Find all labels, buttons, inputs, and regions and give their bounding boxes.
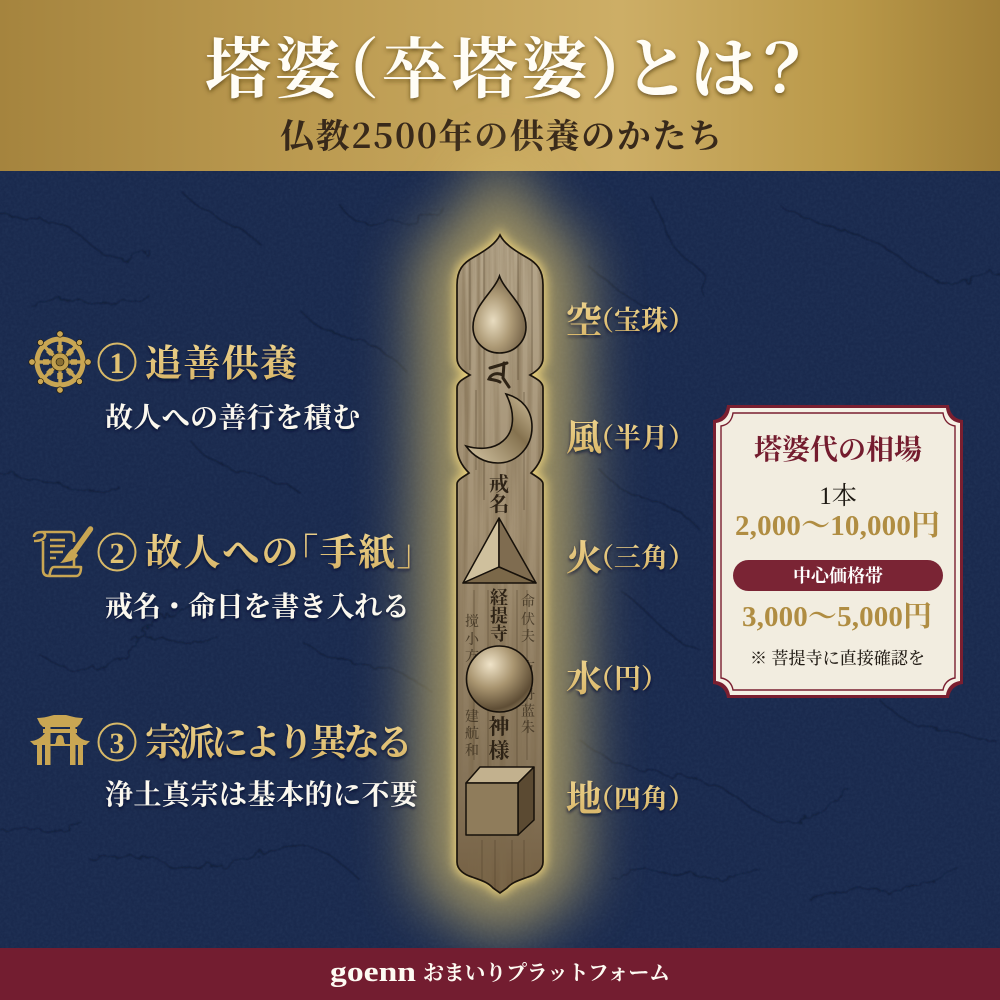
heading 2: 故人への「手紙」 [145, 522, 415, 576]
note: ※ 菩提寺に直接確認を [750, 644, 925, 669]
tablet inscriptions: 夫 [521, 626, 535, 646]
number badge 3 [98, 724, 136, 760]
central price pill [733, 560, 943, 591]
tablet inscriptions: 様 [488, 735, 510, 765]
card title: 塔婆代の相場 [754, 428, 922, 468]
description 2: 戒名・命日を書き入れる [105, 585, 410, 625]
label: earth: 地 [566, 771, 602, 822]
icon: sacred jewel drop (sky) [473, 276, 526, 353]
label: wind: （半月） [600, 416, 682, 455]
element labels column [566, 293, 682, 822]
icon: dharma wheel [29, 331, 91, 393]
tablet inscriptions: 建 [465, 706, 479, 726]
number badge 3: 3 [110, 727, 124, 760]
number badge 2: 2 [110, 537, 124, 570]
tablet inscriptions: 搅 [465, 611, 479, 631]
tablet inscriptions: 小 [465, 629, 480, 649]
icon: cube (earth) [466, 767, 534, 835]
label: sky: 空 [566, 293, 602, 344]
icon: sphere (water) [466, 646, 532, 712]
label: wind [566, 410, 682, 461]
tablet inscriptions: 寺 [490, 620, 508, 646]
navy paper background [0, 170, 1000, 950]
tablet inscriptions: 伏 [521, 609, 535, 629]
subtitle: 仏教2500年の供養のかたち [280, 109, 722, 158]
point 1: memorial merit [29, 331, 360, 436]
sanskrit seed mark [489, 363, 509, 387]
posthumous name text: 戒 [489, 468, 509, 497]
quantity: 1本 [819, 482, 857, 510]
tablet inscriptions: 和 [465, 740, 479, 760]
label: earth [566, 771, 682, 822]
glow behind stupa [457, 235, 543, 893]
icon: scroll and brush [34, 529, 90, 576]
central price pill: 中心価格帯 [793, 562, 883, 588]
heading 1: 追善供養 [145, 333, 297, 387]
number badge 2 [98, 534, 136, 570]
footer band [0, 948, 1000, 1000]
tablet inscriptions: 経 [490, 584, 508, 610]
label: water: 水 [566, 651, 602, 702]
label: water [566, 651, 655, 702]
platform tagline: おまいりプラットフォーム [423, 957, 670, 987]
icon: triangular pyramid (fire) [463, 518, 536, 583]
label: sky: （宝珠） [600, 299, 682, 338]
tablet inscriptions: 神 [488, 711, 510, 741]
heading 3: 宗派により異なる [145, 712, 413, 766]
tablet inscriptions: 丹 [521, 684, 535, 704]
tablet inscriptions: 朱 [521, 717, 535, 737]
panel: price card [713, 405, 963, 698]
tablet inscriptions: 命 [521, 591, 535, 611]
icon: temple gate [30, 715, 90, 765]
description 1: 故人への善行を積む [105, 396, 360, 436]
label: sky [566, 293, 682, 344]
posthumous name text: 名 [489, 488, 509, 517]
header band [0, 0, 1000, 171]
tablet inscriptions: 提 [490, 602, 508, 628]
label: wind: 風 [566, 410, 602, 461]
central price range: 3,000～5,000円 [742, 601, 932, 633]
icon: crescent moon (wind) [466, 394, 532, 463]
title: 塔婆（卒塔婆）とは？ [205, 16, 805, 111]
tablet inscriptions: 航 [465, 723, 479, 743]
posthumous name text [489, 468, 509, 517]
label: fire: 火 [566, 530, 602, 581]
number badge 1 [98, 344, 136, 380]
number badge 1: 1 [110, 347, 124, 380]
description 3: 浄土真宗は基本的に不要 [105, 773, 419, 813]
label: water: （円） [600, 657, 655, 696]
tablet inscriptions: 方 [465, 646, 479, 666]
label: fire [566, 530, 682, 581]
price range: 2,000～10,000円 [735, 510, 940, 542]
tablet inscriptions [465, 584, 535, 765]
point 3: varies by sect [30, 712, 419, 813]
point 2: letter to the deceased [34, 522, 415, 625]
stupa wooden tablet [456, 233, 544, 894]
tablet inscriptions: 方 [521, 657, 535, 677]
label: fire: （三角） [600, 536, 682, 575]
brand name: goenn [330, 956, 416, 988]
tablet inscriptions: 蓝 [521, 701, 535, 721]
label: earth: （四角） [600, 777, 682, 816]
